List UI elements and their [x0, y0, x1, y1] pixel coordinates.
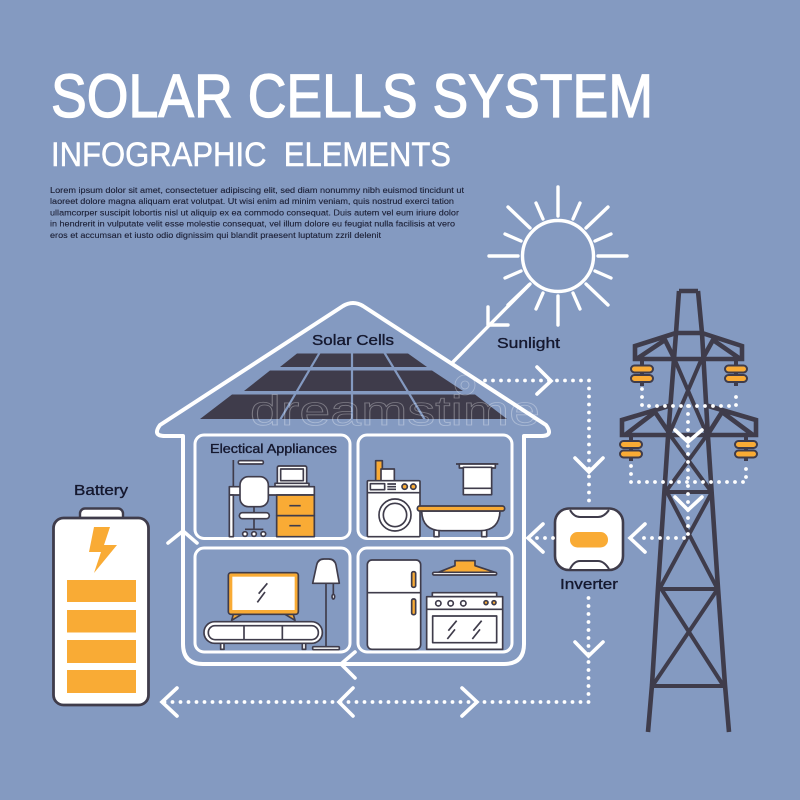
body text: laoreet dolore magna aliquam erat volutpat. Ut wisi enim ad minim veniam, quis nostrud exerci tation	[50, 196, 454, 206]
panel: room frames	[195, 435, 512, 652]
lattice braces	[652, 358, 725, 686]
inverter indicator	[570, 532, 608, 548]
subtitle: INFOGRAPHIC ELEMENTS	[51, 136, 451, 174]
refrigerator	[367, 560, 421, 649]
office desk, chair, laptop	[229, 460, 314, 537]
body text: in hendrerit in vulputate velit esse molestie consequat, vel illum dolore eu feugiat nulla facilisis at vero	[50, 218, 455, 228]
battery body	[54, 518, 148, 705]
washing machine	[367, 461, 420, 537]
title: SOLAR CELLS SYSTEM	[51, 62, 653, 130]
label: electrical appliances: Electical Appliances	[210, 442, 337, 456]
power tower	[622, 291, 756, 732]
television and stand	[204, 573, 322, 649]
bathtub	[417, 506, 505, 537]
battery cap	[80, 508, 123, 522]
flow: solar panels to inverter	[485, 367, 603, 506]
range hood	[433, 561, 497, 575]
towel on rail	[456, 464, 498, 495]
tower legs	[648, 291, 729, 732]
arrow: battery to house	[168, 531, 197, 543]
arrow: sunlight ray	[453, 285, 529, 362]
flow: inverter to battery	[162, 598, 603, 716]
floor lamp	[313, 559, 339, 650]
insulators	[620, 359, 757, 461]
label: battery: Battery	[74, 483, 129, 499]
watermark	[250, 375, 540, 434]
battery charge bars	[67, 580, 136, 693]
house outline	[157, 303, 549, 664]
lower crossarm	[622, 405, 756, 435]
flow: inverter to house	[528, 524, 553, 552]
label: inverter: Inverter	[560, 577, 618, 593]
label: solar cells: Solar Cells	[312, 333, 394, 349]
body text: Lorem ipsum dolor sit amet, consectetuer adipiscing elit, sed diam nonummy nibh euismod tincidunt ut	[50, 185, 465, 195]
appliance illustrations	[204, 460, 505, 650]
upper crossarm	[635, 333, 742, 359]
inverter	[555, 508, 623, 570]
icon: lightning bolt	[89, 527, 117, 573]
icon: sun	[489, 187, 627, 325]
body text: ullamcorper suscipit lobortis nisl ut aliquip ex ea commodo consequat. Duis autem vel eum iriure dolor	[50, 208, 459, 218]
battery	[54, 508, 148, 705]
inverter body	[555, 508, 623, 570]
label: sunlight: Sunlight	[497, 336, 560, 352]
arrow: along house floor	[341, 652, 355, 678]
solar panel array	[200, 352, 507, 420]
body text	[50, 185, 465, 240]
body text: eros et accumsan et iusto odio dignissim qui blandit praesent luptatum zzril delenit	[50, 230, 382, 240]
tower dotted power lines	[630, 389, 746, 552]
stove and oven	[427, 593, 503, 649]
watermark: dreamstime	[250, 387, 540, 434]
